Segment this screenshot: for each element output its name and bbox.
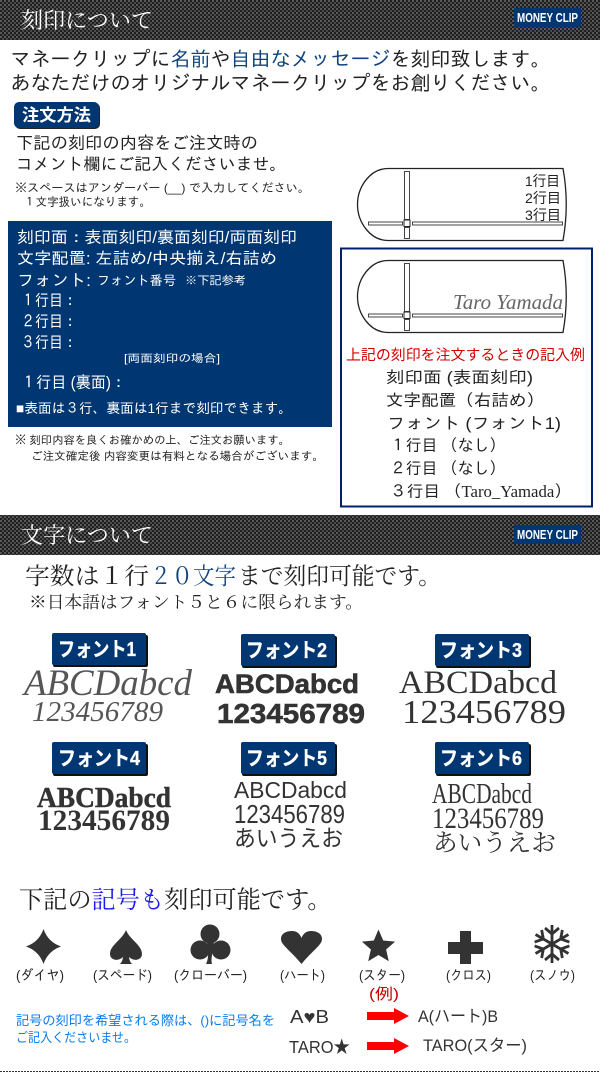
panel: order form template: ■表面は３行、裏面は1行まで刻印できます。: [16, 400, 292, 416]
intro text: マネークリップに名前や自由なメッセージを刻印致します。: [10, 48, 550, 71]
font sample 3: ABCDabcd: [399, 665, 558, 701]
panel: order form template: [8, 221, 332, 427]
underscore note: １文字扱いになります。: [24, 195, 151, 209]
arrow: [367, 1008, 409, 1024]
order instructions: 下記の刻印の内容をご注文時の: [16, 133, 258, 153]
line labels: 1行目: [525, 173, 560, 189]
symbol: heart: (ハート): [280, 967, 325, 983]
font sample 4: [37, 742, 171, 837]
intro text: あなただけのオリジナルマネークリップをお創りください。: [10, 72, 550, 95]
caution note: ※ 刻印内容を良くお確かめの上、ご注文お願います。: [15, 434, 290, 447]
font sample 2: 123456789: [217, 698, 365, 729]
panel: order form template: フォント番号: [97, 273, 176, 288]
badge: money clip: MONEY CLIP: [517, 10, 578, 25]
font sample 2: ABCDabcd: [215, 669, 359, 699]
header title: 文字について: [21, 523, 153, 548]
symbol: snow: [530, 925, 575, 983]
order instructions: [16, 133, 286, 174]
symbol: snow: (スノウ): [530, 967, 575, 983]
symbol order instruction: [16, 1013, 275, 1045]
symbol: diamond: (ダイヤ): [16, 967, 64, 983]
caution note: ご注文確定後 内容変更は有料となる場合がございます。: [31, 450, 324, 463]
underscore note: [15, 181, 310, 209]
font sample 4: フォント4: [58, 748, 141, 770]
panel: order example: [341, 248, 592, 506]
intro text: [10, 48, 550, 95]
symbol: clover: (クローバー): [174, 967, 247, 983]
section header: 刻印について: [0, 0, 600, 40]
example lines: １行目 （なし）: [390, 437, 505, 455]
panel: order form template: [両面刻印の場合]: [124, 353, 220, 365]
underscore note: ※スペースはアンダーバー (__) で入力してください。: [15, 181, 310, 195]
badge: money clip: [514, 525, 581, 544]
symbol: spade: [93, 930, 152, 983]
order method badge: 注文方法: [22, 105, 91, 125]
symbol: star: [359, 930, 405, 983]
example heading: 上記の刻印を注文するときの記入例: [346, 347, 585, 364]
font sample 1: 123456789: [32, 697, 163, 728]
arrow: [367, 1038, 409, 1054]
example lines: 文字配置（右詰め）: [386, 392, 544, 410]
font sample 3: [399, 634, 566, 731]
font sample 1: ABCDabcd: [21, 663, 192, 704]
header title: 刻印について: [21, 8, 153, 33]
example lines: [386, 369, 571, 501]
font sample 5: [234, 742, 347, 851]
example: heart conversion: A(ハート)B: [418, 1007, 498, 1026]
example: heart conversion: [290, 1007, 498, 1027]
example lines: 刻印面 (表面刻印): [386, 369, 533, 387]
panel: order form template: ２行目：: [21, 313, 77, 331]
badge: money clip: [514, 8, 581, 27]
symbol: clover: [174, 924, 247, 983]
money clip diagram: Taro Yamada engraving: [358, 260, 566, 332]
character limit text: 字数は１行: [25, 563, 149, 590]
character limit text: ※日本語はフォント５と６に限られます。: [29, 593, 363, 612]
font sample 1: フォント1: [58, 639, 136, 661]
panel: order form template: 刻印面：表面刻印/裏面刻印/両面刻印: [17, 229, 297, 247]
character limit text: まで刻印可能です。: [238, 563, 441, 590]
character limit text: ２０文字: [150, 563, 236, 590]
panel: order form template: ※下記参考: [185, 274, 246, 287]
example: star conversion: [289, 1036, 527, 1057]
example lines: ２行目 （なし）: [390, 460, 505, 478]
symbol: star: (スター): [359, 967, 405, 983]
badge: money clip: MONEY CLIP: [517, 527, 578, 542]
example label: (例): [369, 986, 399, 1003]
font sample 4: ABCDabcd: [37, 782, 171, 814]
symbol: diamond: [16, 929, 64, 983]
order method badge: [14, 102, 100, 129]
symbol: heart: [280, 931, 325, 983]
font sample 5: 123456789: [234, 799, 345, 829]
example lines: ３行目 （Taro_Yamada）: [390, 482, 571, 501]
panel: order form template: １行目：: [21, 292, 77, 310]
symbols heading: 下記の記号も刻印可能です。: [19, 887, 332, 914]
font sample 5: フォント5: [246, 748, 327, 770]
section header: 文字について: [0, 515, 600, 555]
font sample 5: ABCDabcd: [234, 777, 347, 803]
line labels: 3行目: [525, 207, 561, 223]
symbol: spade: (スペード): [93, 967, 152, 983]
panel: order form template: フォント:: [17, 272, 91, 290]
panel: order form template: １行目 (裏面)：: [21, 374, 126, 392]
font sample 6: フォント6: [440, 748, 522, 770]
font sample 1: [21, 633, 192, 728]
font sample 3: フォント3: [440, 640, 522, 662]
font sample 2: [215, 634, 365, 729]
font sample 3: 123456789: [402, 694, 566, 731]
symbol: cross: [446, 931, 491, 983]
font sample 4: 123456789: [38, 804, 170, 837]
symbol order instruction: 記号の刻印を希望される際は、()に記号名を: [16, 1013, 275, 1028]
money clip diagram: Taro Yamada engraving: Taro Yamada: [453, 290, 563, 314]
font sample 6: ABCDabcd: [432, 779, 532, 810]
caution note: [15, 434, 324, 463]
font sample 6: あいうえお: [433, 830, 556, 857]
font sample 5: あいうえお: [234, 825, 343, 851]
line labels: 2行目: [525, 190, 561, 206]
line labels: [525, 173, 561, 223]
example: star conversion: TARO(スター): [423, 1036, 527, 1055]
example: star conversion: TARO★: [289, 1037, 350, 1057]
panel: order form template: ３行目：: [21, 334, 77, 352]
money clip diagram: line positions: [358, 168, 566, 240]
font sample 2: フォント2: [246, 640, 327, 662]
panel: order form template: 文字配置: 左詰め/中央揃え/右詰め: [17, 250, 277, 268]
symbol: cross: (クロス): [446, 967, 491, 983]
symbol order instruction: ご記入くださいませ。: [16, 1030, 136, 1045]
font sample 6: 123456789: [432, 802, 544, 835]
order instructions: コメント欄にご記入くださいませ。: [16, 155, 286, 174]
font sample 6: [432, 742, 556, 857]
example lines: フォント (フォント1): [387, 415, 561, 433]
character limit text: [25, 563, 441, 612]
example: heart conversion: A♥B: [290, 1007, 329, 1027]
